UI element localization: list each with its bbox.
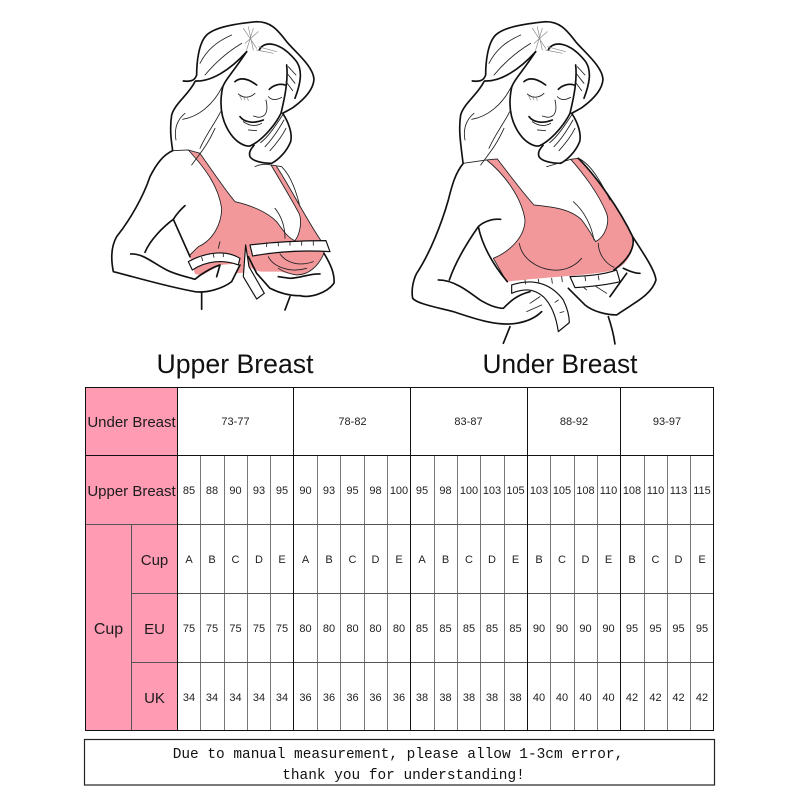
row labels: UK [144,690,165,707]
UK sizes: 42 [649,692,662,704]
upper breast values: 88 [206,485,218,497]
upper breast values: 103 [483,485,501,497]
UK sizes: 34 [183,692,195,704]
UK sizes: 36 [299,692,312,704]
upper breast values: 110 [600,485,617,497]
EU sizes: 80 [369,623,382,635]
heading: Under Breast: Under Breast [482,349,638,379]
bra [188,150,324,275]
cup letters: A [302,554,310,566]
UK sizes: 34 [229,692,242,704]
body and arms [112,150,335,310]
row labels: Cup [94,621,123,638]
under breast ranges: 93-97 [653,416,681,428]
row labels: Under Breast [87,414,177,431]
row labels: Upper Breast [87,483,177,500]
UK sizes: 38 [439,692,452,704]
measurement note box [84,740,714,785]
cup letters: E [278,554,286,566]
upper breast values: 100 [460,485,478,497]
EU sizes: 85 [509,623,522,635]
cup letters: D [675,554,683,566]
measuring tape [188,241,330,299]
illustration: upper breast measurement [112,22,335,310]
cup letters: B [535,554,543,566]
EU sizes: 75 [183,623,195,635]
UK sizes: 38 [486,692,498,704]
UK sizes: 40 [579,692,592,704]
row labels: EU [144,621,165,638]
UK sizes [183,692,708,704]
cup letters: D [255,554,263,566]
upper breast values: 100 [390,485,408,497]
UK sizes: 36 [323,692,335,704]
EU sizes: 80 [323,623,335,635]
upper breast values: 110 [647,485,664,497]
EU sizes: 85 [439,623,452,635]
upper breast values: 93 [323,485,335,497]
table grid [85,387,714,730]
cup letters: A [185,554,193,566]
measuring tape [512,270,620,332]
upper breast values: 98 [369,485,382,497]
UK sizes: 42 [626,692,638,704]
cup letters: B [325,554,333,566]
row labels: Cup [141,552,168,569]
upper breast values [183,485,711,497]
EU sizes: 80 [299,623,312,635]
cup letters: C [558,554,566,566]
upper breast values: 108 [576,485,595,497]
cup letters: C [232,554,240,566]
upper breast values: 93 [253,485,265,497]
UK sizes: 38 [509,692,522,704]
head and hair [460,22,603,165]
EU sizes: 75 [229,623,242,635]
cup letters: C [349,554,357,566]
EU sizes: 85 [463,623,475,635]
size chart table [85,387,714,730]
row labels [87,414,177,707]
EU sizes: 95 [672,623,685,635]
cup letters: D [582,554,590,566]
UK sizes: 34 [253,692,265,704]
upper breast values: 108 [623,485,641,497]
upper breast values: 95 [416,485,428,497]
upper breast values: 90 [229,485,242,497]
EU sizes: 75 [253,623,265,635]
EU sizes: 95 [626,623,638,635]
upper breast values: 95 [276,485,288,497]
body and arms [412,158,656,344]
EU sizes: 95 [696,623,708,635]
UK sizes: 38 [416,692,428,704]
bra [487,158,633,282]
heading: Upper Breast: Upper Breast [156,349,314,379]
upper breast values: 115 [693,485,711,497]
upper breast values: 105 [553,485,571,497]
upper breast values: 95 [346,485,359,497]
UK sizes: 42 [696,692,708,704]
UK sizes: 36 [346,692,359,704]
UK sizes: 40 [602,692,615,704]
EU sizes: 95 [649,623,662,635]
under breast ranges: 73-77 [221,416,250,428]
upper breast values: 85 [183,485,195,497]
measurement note box: thank you for understanding! [282,768,525,784]
cup letters: E [605,554,612,566]
UK sizes: 36 [369,692,382,704]
cup letters: E [698,554,706,566]
EU sizes [183,623,708,635]
EU sizes: 90 [579,623,592,635]
cup letters: D [488,554,496,566]
cup letters: D [372,554,380,566]
cup letters: A [418,554,426,566]
UK sizes: 34 [276,692,288,704]
cup letters: C [652,554,660,566]
under breast ranges: 78-82 [338,416,367,428]
upper breast values: 113 [670,485,687,497]
cup letters: B [208,554,216,566]
UK sizes: 34 [206,692,218,704]
upper breast values: 98 [439,485,452,497]
cup letters: E [512,554,519,566]
UK sizes: 40 [533,692,545,704]
upper breast values: 103 [530,485,548,497]
head and hair [171,22,314,165]
cup letters: B [442,554,449,566]
upper breast values: 105 [506,485,525,497]
upper breast values: 90 [299,485,312,497]
cup letters [185,554,706,566]
cup letters: B [628,554,636,566]
measurement note box: Due to manual measurement, please allow 1-3cm error, [173,747,623,763]
EU sizes: 90 [533,623,545,635]
EU sizes: 75 [206,623,218,635]
under breast ranges: 83-87 [454,416,483,428]
EU sizes: 80 [346,623,359,635]
UK sizes: 38 [463,692,475,704]
UK sizes: 40 [556,692,568,704]
EU sizes: 90 [556,623,568,635]
pink header background [85,387,177,730]
EU sizes: 90 [602,623,615,635]
illustration: under breast measurement [412,22,656,344]
under breast ranges [221,416,681,428]
EU sizes: 85 [486,623,498,635]
cup letters: C [465,554,473,566]
UK sizes: 42 [672,692,685,704]
UK sizes: 36 [393,692,405,704]
under breast ranges: 88-92 [560,416,588,428]
EU sizes: 75 [276,623,288,635]
EU sizes: 85 [416,623,428,635]
cup letters: E [395,554,403,566]
EU sizes: 80 [393,623,405,635]
